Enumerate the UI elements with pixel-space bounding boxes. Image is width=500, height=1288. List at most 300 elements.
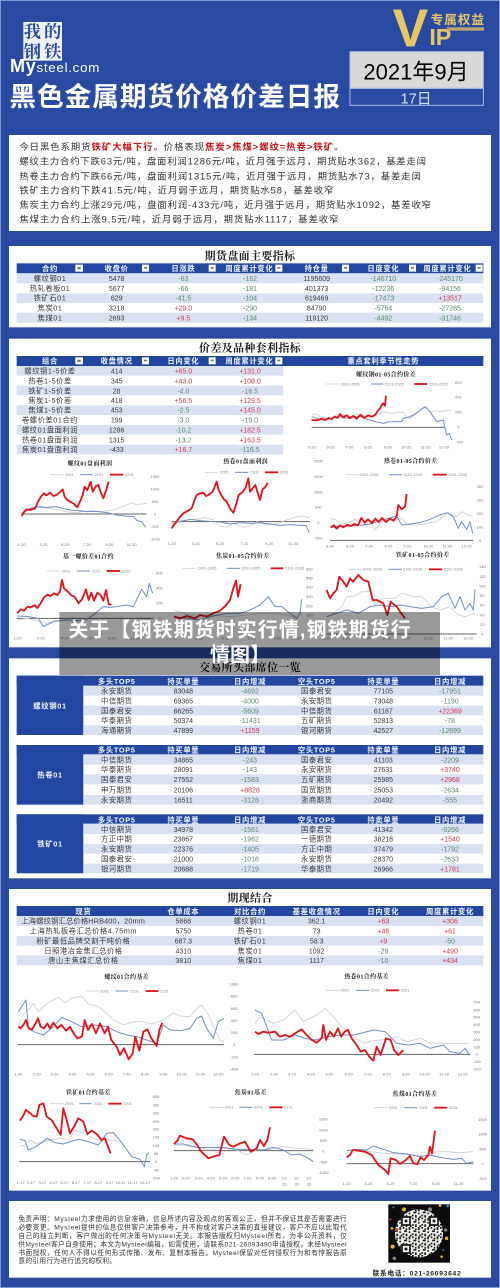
table: spreads: 卷螺价差01合约 xyxy=(22,416,78,425)
chart: hot coil 01 margin: 2101 xyxy=(250,470,260,475)
chart: iron ore 01-05 spread: 8-20 xyxy=(383,635,391,640)
table: rebar 01 positions: 42527 xyxy=(374,728,393,735)
chart: iron ore 01 basis: 2101 xyxy=(94,1101,103,1106)
chart: iron ore 01 basis: 150 xyxy=(153,1135,160,1140)
table: spreads: +145.0 xyxy=(239,408,261,415)
chart: hot coil 01 basis: 300 xyxy=(473,1030,481,1035)
table: spreads: +16.7 xyxy=(174,447,192,454)
chart: coke 01-05 spread: 1-20 xyxy=(169,635,178,640)
table: hot coil 01 positions: -3128 xyxy=(241,798,259,805)
table: iron ore 01 positions: -1405 xyxy=(241,847,259,854)
chart: coke 01 basis: 11- xyxy=(294,1176,300,1181)
table: rebar 01 positions: 持卖单量 xyxy=(367,677,399,686)
table: rebar 01 positions: 多头TOP5 xyxy=(98,677,136,686)
chart: iron ore 01 basis xyxy=(17,1089,161,1185)
table: futures indicators: 持仓量 xyxy=(305,264,329,273)
table: spot basis: -10 xyxy=(378,958,388,965)
table: spot basis: 1117 xyxy=(309,958,324,965)
chart: hot coil 01 basis: 4-20 xyxy=(307,1072,316,1077)
chart: coke 01-05 spread: 200 xyxy=(306,603,313,608)
table: iron ore 01 positions: 国泰君安 xyxy=(101,854,132,863)
chart: rebar 01 basis: 螺纹01合约基差 xyxy=(104,973,149,981)
table: spot basis: 5750 xyxy=(176,929,191,936)
chart: coking coal 01 basis: 2001 xyxy=(389,1105,399,1110)
disclaimer text: 供Mysteel客户自身使用；本文为Mysteel编辑，如需使用，请联系021-26093490申请授权，未经Mysteel xyxy=(18,1240,347,1249)
table: iron ore 01 positions: 银河期货 xyxy=(101,864,132,873)
table: iron ore 01 positions: -1962 xyxy=(241,837,259,844)
chart: coke 01 basis: 1000 xyxy=(319,1127,329,1132)
table: rebar 01 positions: 77105 xyxy=(374,689,393,696)
chart: hot coil 01 basis: 11-20 xyxy=(439,1072,450,1077)
chart: hot coil 01 margin: 热卷01盘面利润 xyxy=(223,458,268,466)
chart: iron ore 01-05 spread: 11-20 xyxy=(443,635,454,640)
chart: iron ore 01 basis: 200 xyxy=(153,1126,160,1131)
chart: coking coal 01 basis: 7-20 xyxy=(409,1181,418,1186)
chart: basis-rebar spread 01: 基一螺价差01合约 xyxy=(63,553,114,561)
table: futures indicators: 1195609 xyxy=(303,276,330,283)
table: spreads: -3.0 xyxy=(177,418,189,425)
table: futures indicators: -41.5 xyxy=(175,296,191,303)
disclaimer text: 意的引用行为进行追究的权利。 xyxy=(18,1256,116,1265)
chart: rebar 01 margin: 9-20 xyxy=(105,542,114,547)
table: futures indicators: -290 xyxy=(243,306,257,313)
table: hot coil 01 positions: 永安期货 xyxy=(101,796,132,805)
table: hot coil 01 positions: 27631 xyxy=(374,767,393,774)
table: iron ore 01 positions: -2633 xyxy=(441,856,459,863)
chart: coking coal 01 basis: 1500 xyxy=(478,1117,488,1122)
header logo: Mysteel: 钢 xyxy=(24,43,41,62)
chart: hot coil 01 basis: 600 xyxy=(473,1007,481,1012)
chart: iron ore 01 basis: 3-17 xyxy=(38,1180,47,1185)
table: iron ore 01 positions: 持买单量 xyxy=(167,815,199,824)
table: spreads: -10.2 xyxy=(175,427,191,434)
table: spreads: 热卷1-5价差 xyxy=(28,376,72,385)
table: rebar 01 positions xyxy=(17,676,483,735)
chart: coke 01 basis: 12- xyxy=(306,1176,313,1181)
table: iron ore 01 positions: 22376 xyxy=(174,847,193,854)
table: spot basis: +9 xyxy=(379,939,387,946)
chart: hot coil 01-05 spread: 5-20 xyxy=(326,543,335,548)
chart: coke 01-05 spread: 7-20 xyxy=(247,635,256,640)
table: spreads: 焦炭01盘面利润 xyxy=(22,445,78,454)
table: futures indicators: 401373 xyxy=(305,286,328,293)
chart: rebar 01 basis: 0 xyxy=(233,1042,236,1047)
table: futures indicators: -4492 xyxy=(374,315,392,322)
chart: hot coil 01 basis: 700 xyxy=(473,1000,481,1005)
table: iron ore 01 positions: +1540 xyxy=(440,837,460,844)
panel: daily summary xyxy=(9,135,491,231)
chart: iron ore 01-05 spread: 120 xyxy=(479,574,486,579)
chart: hot coil 01-05 spread: 7-20 xyxy=(365,543,374,548)
table: spot basis: 对比合约 xyxy=(234,907,266,916)
header logo: Mysteel: 铁 xyxy=(44,43,62,62)
chart: hot coil 01 basis: 7-20 xyxy=(364,1072,372,1077)
table: futures indicators: 收盘价 xyxy=(105,264,129,273)
chart: hot coil 01-05 spread: 12-20 xyxy=(462,543,473,548)
chart: coking coal 01 basis: 5-20 xyxy=(387,1181,395,1186)
chart: coke 01 basis: 1901 xyxy=(224,1105,234,1110)
chart: basis-rebar spread 01: 2001 xyxy=(62,568,71,573)
chart: iron ore 01-05 spread: 5-20 xyxy=(323,635,331,640)
chart: hot coil 01 basis: 12-20 xyxy=(458,1072,469,1077)
chart: coking coal 01 basis: 焦煤01合约基差 xyxy=(393,1090,437,1098)
table: futures indicators: 热轧卷板01 xyxy=(30,284,70,293)
chart: iron ore 01-05 spread: 80 xyxy=(480,593,485,598)
chart: coke 01 basis: 0 xyxy=(322,1149,325,1154)
table: futures indicators: +13517 xyxy=(438,296,462,303)
chart: basis-rebar spread 01: 200 xyxy=(156,601,163,606)
table: rebar 01 positions: 50374 xyxy=(174,718,193,725)
chart: rebar 01 margin: 0 xyxy=(154,511,157,516)
chart: hot coil 01 margin: 11-20 xyxy=(288,541,299,546)
chart: hot coil 01 margin: 2201 xyxy=(280,470,290,475)
table: spot basis: +61 xyxy=(444,929,456,936)
table: futures indicators: -12236 xyxy=(372,286,394,293)
table: hot coil 01 positions: 空头TOP5 xyxy=(298,746,336,755)
table: futures indicators: 周度累计变化 xyxy=(423,264,471,273)
chart: hot coil 01 basis: 400 xyxy=(473,1022,481,1027)
chart: iron ore 01-05 spread: 20 xyxy=(480,622,485,627)
table: spot basis: 3810 xyxy=(176,958,191,965)
chart: hot coil 01-05 spread: 400 xyxy=(477,484,484,489)
chart: iron ore 01 basis: 350 xyxy=(153,1102,160,1107)
table: hot coil 01 positions: 25053 xyxy=(374,788,393,795)
chart: coke 01 basis: 1500 xyxy=(319,1116,329,1121)
chart: coking coal 01 basis: 3-20 xyxy=(364,1181,373,1186)
chart: hot coil 01 basis: 2101 xyxy=(371,988,380,993)
table: hot coil 01 positions: 28091 xyxy=(174,767,193,774)
chart: rebar 01-05 spread: 6-20 xyxy=(327,445,335,450)
panel: daily summary: 今日黑色系期货铁矿大幅下行。价格表现焦炭>焦煤>螺纹=热卷>铁矿。 xyxy=(19,141,343,152)
chart: rebar 01 basis: 3-20 xyxy=(50,1072,59,1077)
chart: coke 01 basis xyxy=(170,1089,329,1186)
chart: rebar 01-05 spread: 螺纹钢01-05合约价差 xyxy=(356,371,416,379)
chart: coke 01 basis: 1-20 xyxy=(170,1176,179,1181)
chart: hot coil 01-05 spread: 100 xyxy=(477,525,484,530)
table: spot basis: -29 xyxy=(378,948,388,955)
chart: iron ore 01 basis: 50 xyxy=(154,1151,159,1156)
chart: coke 01 basis: 20 xyxy=(282,1181,287,1186)
table: hot coil 01 positions: -143 xyxy=(243,767,257,774)
table: iron ore 01 positions: -1018 xyxy=(241,856,259,863)
table: hot coil 01 positions: 热卷01 xyxy=(37,770,63,779)
chart: basis-rebar spread 01: 7-20 xyxy=(85,635,94,640)
table: iron ore 01 positions: 34978 xyxy=(174,827,193,834)
chart: basis-rebar spread 01: 9-20 xyxy=(108,635,116,640)
chart: hot coil 01-05 spread xyxy=(326,457,484,548)
chart: iron ore 01-05 spread: 40 xyxy=(480,612,485,617)
chart: iron ore 01 basis: 7-17 xyxy=(83,1180,92,1185)
table: iron ore 01 positions: 国泰君安 xyxy=(301,825,332,834)
table: futures indicators: 119120 xyxy=(305,315,328,322)
chart: rebar 01-05 spread: 2101-2105 xyxy=(385,381,405,386)
table: futures indicators: 合约 xyxy=(42,264,58,273)
chart: coke 01 basis: 8-20 xyxy=(256,1176,265,1181)
table: spot basis: 焦煤01 xyxy=(238,956,262,965)
chart: rebar 01-05 spread: 400 xyxy=(455,395,462,400)
chart: coke 01 basis: 2001 xyxy=(254,1105,264,1110)
table: rebar 01 positions: +22369 xyxy=(438,708,462,715)
chart: coking coal 01 basis: 500 xyxy=(479,1146,487,1151)
table: iron ore 01 positions: 多头TOP5 xyxy=(98,815,136,824)
table: futures indicators: 5677 xyxy=(109,286,125,293)
table: rebar 01 positions: 永安期货 xyxy=(101,687,132,696)
chart: rebar 01-05 spread xyxy=(308,371,464,450)
table: rebar 01 positions: -5609 xyxy=(241,708,259,715)
table: rebar 01 positions: 华泰期货 xyxy=(101,716,132,725)
charts: basis row two xyxy=(17,1089,488,1186)
table: futures indicators: -146710 xyxy=(370,276,396,283)
chart: coke 01 basis: 6-20 xyxy=(231,1176,240,1181)
chart: hot coil 01 basis: 2001 xyxy=(341,988,350,993)
panel: futures-spot basis xyxy=(9,889,491,1191)
disclaimer text: 自己的独立判断，客户做出的任何决策与Mysteel无关。本报告版权归Mysteel所有，为非公开资料，仅 xyxy=(18,1231,347,1240)
chart: rebar 01 basis: 600 xyxy=(231,1006,238,1011)
chart: basis-rebar spread 01: 1-20 xyxy=(14,635,22,640)
chart: coke 01-05 spread: 400 xyxy=(306,585,313,590)
table: iron ore 01 positions: 永安期货 xyxy=(301,854,332,863)
table: hot coil 01 positions: -2209 xyxy=(441,757,459,764)
table: spreads: 414 xyxy=(111,369,123,376)
table: spot basis: +46 xyxy=(377,929,389,936)
VIP badge: 专属权益 xyxy=(431,12,484,27)
chart: rebar 01 margin: 1500 xyxy=(151,474,160,479)
chart: coke 01 basis: 焦炭01基差 xyxy=(235,1089,267,1097)
table: rebar 01 positions: +1159 xyxy=(240,728,260,735)
table: iron ore 01 positions: 21000 xyxy=(174,856,193,863)
chart: rebar 01 basis: 8-20 xyxy=(141,1072,150,1077)
chart: rebar 01 margin: 7-20 xyxy=(83,542,91,547)
table: futures indicators: -27285 xyxy=(439,306,461,313)
chart: iron ore 01-05 spread: 6-20 xyxy=(343,635,351,640)
table: iron ore 01 positions: 日内增减 xyxy=(434,815,466,824)
chart: rebar 01 margin: 螺纹01盘面利润 xyxy=(68,459,112,467)
table: rebar 01 positions: 持买单量 xyxy=(167,677,199,686)
heading: spreads: 价差及品种套利指标 xyxy=(199,340,302,354)
chart: coking coal 01 basis: 9-20 xyxy=(432,1181,440,1186)
header logo: Mysteel: 我 xyxy=(24,23,42,42)
table: spreads: -433 xyxy=(110,447,124,454)
chart: rebar 01 basis: 11-20 xyxy=(195,1072,206,1077)
table: futures indicators: 619469 xyxy=(305,296,328,303)
date box: 17日 xyxy=(401,91,431,107)
chart: iron ore 01 basis: 12-17 xyxy=(140,1180,151,1185)
table: hot coil 01 positions: 国贸期货 xyxy=(301,786,332,795)
chart: iron ore 01 basis: 250 xyxy=(153,1119,160,1124)
table: spreads: -13.2 xyxy=(175,437,191,444)
table: spreads: 453 xyxy=(111,408,123,415)
table: hot coil 01 positions: -555 xyxy=(443,798,457,805)
table: futures indicators: -63 xyxy=(178,276,188,283)
chart: hot coil 01 margin: 7-20 xyxy=(240,541,249,546)
chart: coke 01-05 spread: 2101-2105 xyxy=(285,566,305,571)
table: spot basis: 上海热轧板卷汇总价格4.75mm xyxy=(30,927,137,936)
table: futures indicators: 3218 xyxy=(109,306,125,313)
chart: iron ore 01-05 spread: 10-20 xyxy=(423,635,434,640)
chart: basis-rebar spread 01: 0 xyxy=(158,616,161,621)
chart: iron ore 01-05 spread: 60 xyxy=(480,603,485,608)
table: iron ore 01 positions: 华泰期货 xyxy=(301,864,332,873)
chart: rebar 01-05 spread: -200 xyxy=(455,440,464,445)
table: rebar 01 positions: 47899 xyxy=(174,728,193,735)
charts: profit and spread row xyxy=(14,457,486,640)
table: iron ore 01 positions: 20688 xyxy=(174,866,193,873)
chart: hot coil 01 margin xyxy=(168,458,324,546)
table: spreads: +182.5 xyxy=(239,427,261,434)
table: spot basis: 4310 xyxy=(176,948,191,955)
chart: hot coil 01-05 spread: 11-20 xyxy=(442,543,453,548)
chart: coking coal 01 basis: 0 xyxy=(482,1161,485,1166)
table: hot coil 01 positions: 中信期货 xyxy=(101,755,132,764)
chart: basis-rebar spread 01: 11-20 xyxy=(130,635,141,640)
table: spot basis: 日内变化 xyxy=(367,907,399,916)
table: iron ore 01 positions: 23867 xyxy=(174,837,193,844)
table: hot coil 01 positions: 16511 xyxy=(174,798,193,805)
table: rebar 01 positions: -17951 xyxy=(439,689,461,696)
chart: basis-rebar spread 01: 2102 xyxy=(122,568,131,573)
table: hot coil 01 positions: 20106 xyxy=(174,788,193,795)
table: hot coil 01 positions: 20492 xyxy=(374,798,393,805)
chart: iron ore 01-05 spread: 140 xyxy=(479,564,486,569)
panel: daily summary: 螺纹主力合约下跌63元/吨，盘面利润1286元/吨，近月强于远月，期货贴水362，基差走阔 xyxy=(19,156,426,167)
table: spreads: -19.0 xyxy=(242,418,258,425)
chart: iron ore 01 basis: 0 xyxy=(155,1159,158,1164)
chart: hot coil 01 basis: 200 xyxy=(473,1037,481,1042)
table: rebar 01 positions: 日内增减 xyxy=(434,677,466,686)
table: rebar 01 positions: -1190 xyxy=(441,698,459,705)
chart: hot coil 01-05 spread: 0 xyxy=(479,538,482,543)
panel: top exchange positions xyxy=(9,658,491,878)
table: futures indicators: -104 xyxy=(243,296,257,303)
chart: basis-rebar spread 01: 600 xyxy=(156,571,163,576)
chart: rebar 01 margin: 2201 xyxy=(125,472,135,477)
chart: rebar 01 margin: 2101 xyxy=(94,472,104,477)
table: hot coil 01 positions: -2634 xyxy=(441,788,459,795)
table: rebar 01 positions: -4692 xyxy=(241,689,259,696)
table: rebar 01 positions: 空头TOP5 xyxy=(298,677,336,686)
chart: rebar 01 basis: 800 xyxy=(231,994,238,999)
table: futures indicators: 84790 xyxy=(307,306,327,313)
chart: hot coil 01 margin: 9-20 xyxy=(265,541,274,546)
chart: hot coil 01 margin: 2000 xyxy=(314,458,324,463)
chart: rebar 01 basis: 2101 xyxy=(130,988,140,993)
table: spot basis: 上海螺纹钢汇总价格HRB400，20mm xyxy=(21,917,145,926)
chart: iron ore 01 basis: 100 xyxy=(153,1143,160,1148)
chart: rebar 01 basis: 4-20 xyxy=(68,1072,77,1077)
chart: rebar 01 basis: 1000 xyxy=(230,982,239,987)
table: rebar 01 positions: -11431 xyxy=(239,718,261,725)
table: iron ore 01 positions: -1792 xyxy=(441,847,459,854)
table: iron ore 01 positions: 永安期货 xyxy=(101,845,132,854)
chart: basis-rebar spread 01: 2101 xyxy=(92,568,101,573)
table: hot coil 01 positions: +3740 xyxy=(440,767,460,774)
header logo: Mysteel: Mysteel.com xyxy=(10,56,99,76)
chart: coking coal 01 basis: 1-20 xyxy=(343,1181,351,1186)
table: spreads: 28 xyxy=(113,388,121,395)
table: hot coil 01 positions: +8828 xyxy=(240,788,260,795)
table: hot coil 01 positions: 申万期货 xyxy=(101,786,132,795)
chart: iron ore 01 basis: 5-17 xyxy=(60,1180,69,1185)
chart: rebar 01-05 spread: 2001-2005 xyxy=(341,381,361,386)
chart: coke 01-05 spread: 2001-2005 xyxy=(241,566,261,571)
table: spot basis: 粉矿最低品牌交割干吨价格 xyxy=(36,937,130,946)
chart: hot coil 01 basis: 热卷01合约基差 xyxy=(344,973,389,981)
table: futures indicators: 螺纹钢01 xyxy=(34,274,66,283)
chart: basis-rebar spread 01: 3-20 xyxy=(37,635,45,640)
chart: rebar 01-05 spread: 5-20 xyxy=(308,445,316,450)
table: hot coil 01 positions: 25985 xyxy=(374,777,393,784)
chart: hot coil 01 margin: 5-20 xyxy=(216,541,225,546)
table: iron ore 01 positions: 日内增减 xyxy=(234,815,266,824)
table: iron ore 01 positions: 一德期货 xyxy=(301,835,332,844)
table: futures indicators: 焦煤01 xyxy=(38,313,62,322)
chart: rebar 01 basis xyxy=(14,973,239,1077)
chart: hot coil 01-05 spread: 6-20 xyxy=(346,543,355,548)
chart: coking coal 01 basis xyxy=(343,1090,488,1186)
header logo: Mysteel: 的 xyxy=(44,23,61,42)
disclaimer text: 书面授权，任何人不得以任何形式传播、发布、复制本报告。Mysteel保留对任何侵权行为和有悖报告原 xyxy=(18,1248,347,1257)
VIP badge: V xyxy=(393,0,429,59)
table: hot coil 01 positions: 华泰期货 xyxy=(101,765,132,774)
chart: rebar 01 basis: 5-20 xyxy=(86,1072,95,1077)
table: futures indicators: 629 xyxy=(111,296,123,303)
table: rebar 01 positions: 银河期货 xyxy=(301,726,332,735)
chart: hot coil 01-05 spread: 9-20 xyxy=(403,543,412,548)
chart: rebar 01-05 spread: 9-20 xyxy=(384,445,392,450)
table: rebar 01 positions: 海通期货 xyxy=(101,726,132,735)
chart: coking coal 01 basis: 11-20 xyxy=(453,1181,464,1186)
table: spreads: 345 xyxy=(111,378,123,385)
chart: rebar 01-05 spread: 0 xyxy=(457,425,460,430)
chart: rebar 01 basis: 200 xyxy=(231,1030,238,1035)
chart: hot coil 01 basis: 6-20 xyxy=(345,1072,353,1077)
table: futures indicators: 铁矿石01 xyxy=(34,294,66,303)
chart: rebar 01 basis: 12-20 xyxy=(213,1072,224,1077)
overlay banner: 情图】 xyxy=(210,644,270,667)
chart: rebar 01-05 spread: 200 xyxy=(455,410,462,415)
table: spreads: +108.0 xyxy=(239,378,261,385)
table: spreads: 199 xyxy=(111,418,123,425)
table: spreads: 螺纹钢1-5价差 xyxy=(24,367,76,376)
table: spreads: 焦炭1-5价差 xyxy=(28,396,72,405)
heading: top positions: 交易所头部席位一览 xyxy=(199,660,301,674)
chart: rebar 01 basis: 10-20 xyxy=(177,1072,188,1077)
chart: iron ore 01 basis: 300 xyxy=(153,1111,160,1116)
chart: rebar 01 margin: 500 xyxy=(152,499,159,504)
chart: coking coal 01 basis: 1000 xyxy=(478,1132,488,1137)
chart: rebar 01 margin: 2001 xyxy=(65,472,75,477)
table: iron ore 01 positions: 中信期货 xyxy=(101,825,132,834)
table: hot coil 01 positions: 日内增减 xyxy=(434,746,466,755)
chart: hot coil 01 margin: 1500 xyxy=(314,474,324,479)
chart: rebar 01 margin: 3-20 xyxy=(39,542,48,547)
chart: iron ore 01-05 spread: 7-20 xyxy=(363,635,371,640)
icon: QR code xyxy=(388,1204,450,1263)
table: spreads xyxy=(17,356,483,454)
overlay banner: 关于【钢铁期货时实行情,钢铁期货行 xyxy=(68,618,411,642)
table: spot basis: 焦炭01 xyxy=(238,946,262,955)
table: spreads: 1286 xyxy=(109,427,125,434)
table: hot coil 01 positions: 国泰君安 xyxy=(101,775,132,784)
table: spreads: 热卷01盘面利润 xyxy=(22,435,78,444)
table: futures indicators: 5478 xyxy=(109,276,125,283)
chart: hot coil 01-05 spread: 10-20 xyxy=(423,543,434,548)
table: spot basis: 唐山主焦煤汇总价格 xyxy=(48,956,119,965)
chart: hot coil 01 basis: 0 xyxy=(476,1052,479,1057)
table: futures indicators: -17473 xyxy=(372,296,394,303)
panel: daily summary: 焦煤主力合约上涨9.5元/吨，近月弱于远月，期货贴水1117，基差收窄 xyxy=(19,214,338,225)
chart: rebar 01-05 spread: 8-20 xyxy=(364,445,373,450)
